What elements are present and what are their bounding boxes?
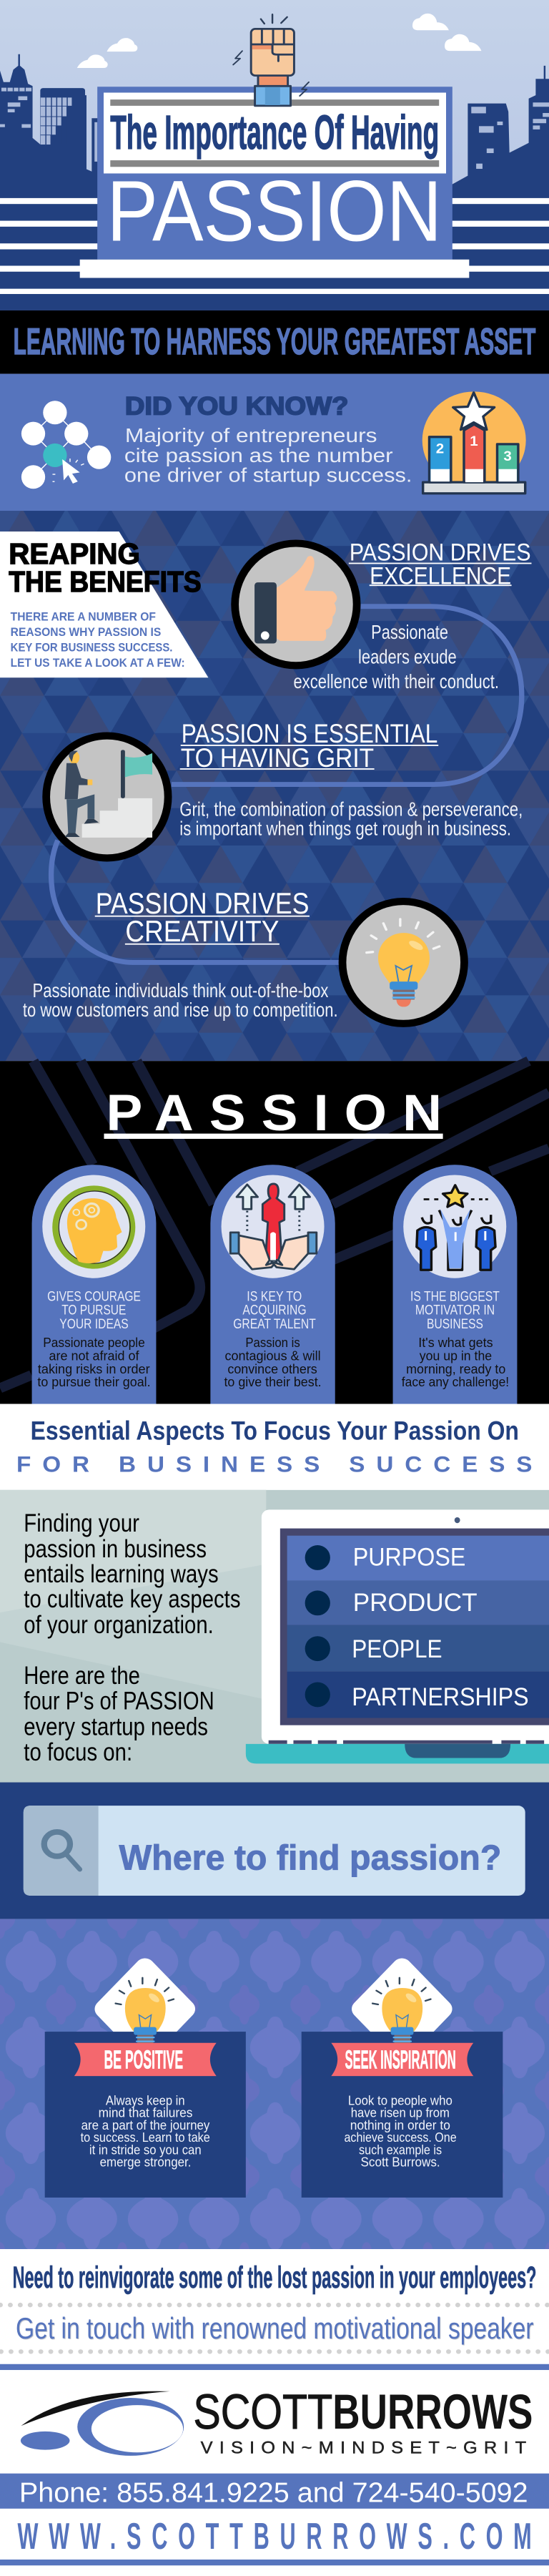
creativity heading: [95, 887, 310, 949]
motivator text: It's what gets: [418, 1336, 493, 1351]
icon: magnifier: [44, 1832, 80, 1869]
motivator text: [402, 1336, 509, 1390]
talent text: [224, 1336, 322, 1390]
clouds: [77, 14, 481, 68]
laptop: [246, 1509, 549, 1763]
talent text: contagious & will: [224, 1348, 321, 1363]
courage text: to pursue their goal.: [37, 1375, 151, 1390]
intro text: REASONS WHY PASSION IS: [11, 625, 161, 639]
card: seek inspiration: [302, 1967, 503, 2198]
intro text: Here are the: [24, 1661, 140, 1690]
icon: light bulb: [342, 901, 464, 1024]
panel: passion traits: [0, 1061, 549, 1404]
title plaque: [80, 87, 469, 278]
motivator text: morning, ready to: [406, 1361, 505, 1377]
reaping heading: THE BENEFITS: [9, 565, 202, 598]
talent text: to give their best.: [224, 1375, 322, 1390]
phone bar: Phone: 855.841.9225 and 724-540-5092: [19, 2478, 528, 2508]
intro text: THERE ARE A NUMBER OF: [11, 610, 156, 623]
talent title: IS KEY TO: [247, 1289, 302, 1304]
did you know text: Majority of entrepreneurs: [125, 425, 377, 447]
creativity heading: CREATIVITY: [125, 915, 279, 949]
search text: Where to find passion?: [119, 1838, 501, 1877]
excellence text: Passionate: [371, 622, 448, 644]
be positive text: are a part of the journey: [81, 2118, 210, 2133]
seek inspiration text: Look to people who: [348, 2094, 452, 2108]
talent text: Passion is: [245, 1336, 300, 1351]
creativity text: to wow customers and rise up to competition.: [23, 999, 338, 1022]
column: talent: [210, 1165, 335, 1404]
essential aspects heading: [0, 1404, 549, 1490]
talent title: [233, 1289, 316, 1332]
panel: reaping the benefits: [0, 511, 549, 1061]
seek inspiration text: achieve success. One: [344, 2130, 457, 2145]
seek inspiration text: [344, 2094, 457, 2170]
panel: footer: [0, 2249, 549, 2576]
skyline: [0, 54, 549, 200]
motivator text: you up in the: [420, 1348, 492, 1363]
call to action line: [0, 2305, 549, 2351]
icon: head with gears: [55, 1188, 132, 1266]
grit heading: TO HAVING GRIT: [181, 744, 374, 773]
creativity text: Passionate individuals think out-of-the-box: [33, 980, 328, 1002]
talent text: convince others: [227, 1361, 317, 1377]
connector path: [51, 607, 522, 962]
be positive text: it in stride so you can: [89, 2143, 202, 2158]
icon: team with star: [417, 1185, 495, 1270]
motivator title: BUSINESS: [427, 1317, 483, 1332]
intro text: every startup needs: [24, 1712, 208, 1740]
courage title: YOUR IDEAS: [59, 1317, 129, 1332]
icon: raised fist: [233, 14, 309, 106]
motivator title: MOTIVATOR IN: [415, 1303, 495, 1318]
card: be positive: [45, 1967, 246, 2198]
list: four Ps: PRODUCT: [353, 1588, 478, 1617]
panel: four Ps: [0, 1490, 549, 1783]
intro text: LET US TAKE A LOOK AT A FEW:: [11, 657, 185, 670]
excellence heading: [349, 539, 532, 589]
callout: intro: [0, 532, 208, 677]
be positive text: [81, 2094, 210, 2170]
intro text: entails learning ways: [24, 1559, 219, 1588]
did you know text: [124, 425, 412, 486]
road stripes: [0, 197, 549, 310]
icon: climbing stairs: [46, 736, 168, 858]
courage text: [37, 1336, 151, 1390]
big word passion: PASSION: [107, 163, 442, 260]
logo: scott burrows: [21, 2385, 533, 2457]
icon: thumbs up: [235, 543, 357, 665]
building windows: [0, 88, 549, 169]
panel: did you know: [0, 374, 549, 511]
intro text: to cultivate key aspects: [24, 1585, 240, 1613]
reaping heading: REAPING: [9, 537, 140, 570]
panel: where to find passion: [0, 1919, 549, 2249]
motivator text: face any challenge!: [402, 1375, 509, 1390]
icon: podium with star: [422, 391, 526, 494]
be positive text: mind that failures: [99, 2106, 192, 2120]
excellence heading: EXCELLENCE: [370, 562, 511, 589]
courage title: TO PURSUE: [61, 1303, 126, 1318]
list: four Ps: [352, 1543, 529, 1711]
seek inspiration text: Scott Burrows.: [360, 2155, 440, 2170]
intro text: KEY FOR BUSINESS SUCCESS.: [11, 641, 172, 654]
excellence text: [293, 622, 499, 693]
list: four Ps: PEOPLE: [352, 1635, 442, 1663]
be positive text: to success. Learn to take: [81, 2130, 210, 2145]
seek inspiration text: nothing in order to: [350, 2118, 450, 2133]
intro text: Finding your: [24, 1509, 139, 1537]
seek inspiration text: such example is: [359, 2143, 442, 2158]
intro text: four P's of PASSION: [24, 1687, 214, 1715]
did you know text: cite passion as the number: [124, 445, 393, 467]
icon: podium with star: 1: [470, 434, 478, 449]
talent title: GREAT TALENT: [233, 1317, 316, 1332]
be positive text: Always keep in: [106, 2094, 185, 2108]
column: courage: [32, 1165, 156, 1404]
subheading: FOR BUSINESS SUCCESS: [16, 1452, 532, 1476]
courage text: Passionate people: [43, 1336, 145, 1351]
subtitle band: [0, 310, 549, 374]
list: four Ps: PURPOSE: [353, 1543, 465, 1571]
icon: podium with star: 3: [503, 449, 512, 464]
logo: scott burrows: SCOTT: [193, 2385, 332, 2440]
intro text: [11, 610, 185, 670]
did you know text: one driver of startup success.: [124, 464, 412, 486]
courage title: GIVES COURAGE: [47, 1289, 141, 1304]
grit heading: PASSION IS ESSENTIAL: [182, 720, 437, 748]
intro text: of your organization.: [24, 1610, 214, 1639]
courage text: taking risks in order: [38, 1361, 150, 1377]
icon: network with cursor: [21, 401, 111, 489]
courage title: [47, 1289, 141, 1332]
column: motivator: [393, 1165, 517, 1404]
card: be positive: BE POSITIVE: [104, 2045, 183, 2074]
creativity text: [23, 980, 338, 1022]
hero header: [0, 0, 549, 310]
be positive text: emerge stronger.: [100, 2155, 191, 2170]
seek inspiration text: have risen up from: [351, 2106, 450, 2120]
grit heading: [180, 720, 438, 773]
website: WWW.SCOTTBURROWS.COM: [17, 2515, 532, 2557]
grit text: [179, 798, 523, 840]
motivator title: [410, 1289, 500, 1332]
did you know heading: DID YOU KNOW?: [125, 392, 348, 420]
talent title: ACQUIRING: [242, 1303, 307, 1318]
excellence text: leaders exude: [358, 646, 457, 668]
courage text: are not afraid of: [49, 1348, 139, 1363]
intro text: passion in business: [24, 1534, 207, 1563]
icon: hands lifting person: [230, 1184, 317, 1269]
reaping heading: [9, 537, 202, 598]
motivator title: IS THE BIGGEST: [410, 1289, 500, 1304]
icon: podium with star: 2: [436, 441, 444, 457]
panel: search bar: [0, 1783, 549, 1919]
logo: scott burrows: VISION~MINDSET~GRIT: [201, 2439, 526, 2457]
passion heading: PASSION: [106, 1084, 442, 1142]
intro text: [24, 1509, 240, 1766]
creativity heading: PASSION DRIVES: [96, 887, 309, 921]
intro text: to focus on:: [24, 1738, 132, 1766]
